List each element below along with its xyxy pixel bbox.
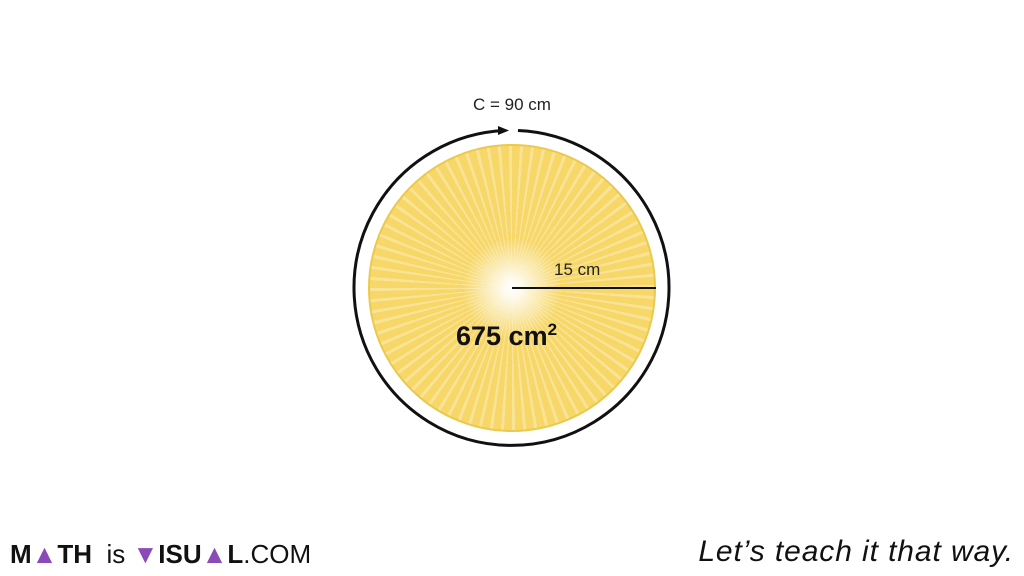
yellow disk (368, 144, 656, 432)
circle diagram (352, 95, 670, 447)
radius line (512, 287, 656, 289)
tagline: Let’s teach it that way. (698, 535, 1014, 568)
outer circumference ring with arrow (352, 126, 670, 447)
label: area: 675 cm2 (456, 320, 557, 351)
label: circumference: C = 90 cm (473, 95, 551, 114)
label: radius: 15 cm (554, 260, 600, 279)
logo: M▲TH is ▼ISU▲L.COM (10, 539, 311, 569)
